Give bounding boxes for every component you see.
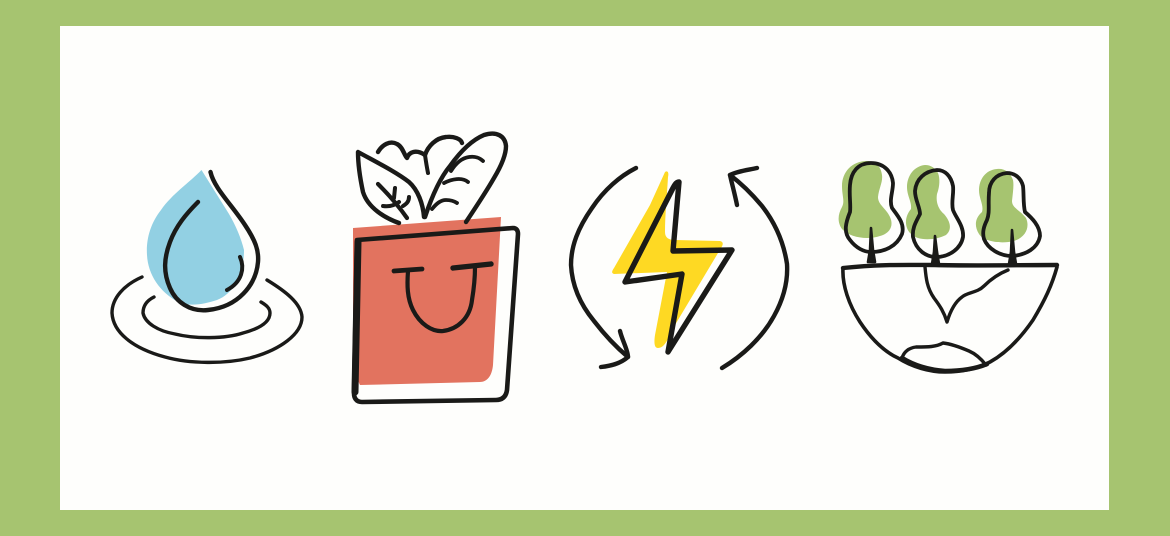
tree foliage colour: [839, 161, 1028, 242]
icon: trees on half globe: [839, 161, 1057, 372]
icon: lightning bolt with cycle arrows: [571, 168, 787, 368]
icon: water drop with ripples: [112, 170, 302, 362]
icon: shopping bag with leaves: [353, 134, 518, 402]
